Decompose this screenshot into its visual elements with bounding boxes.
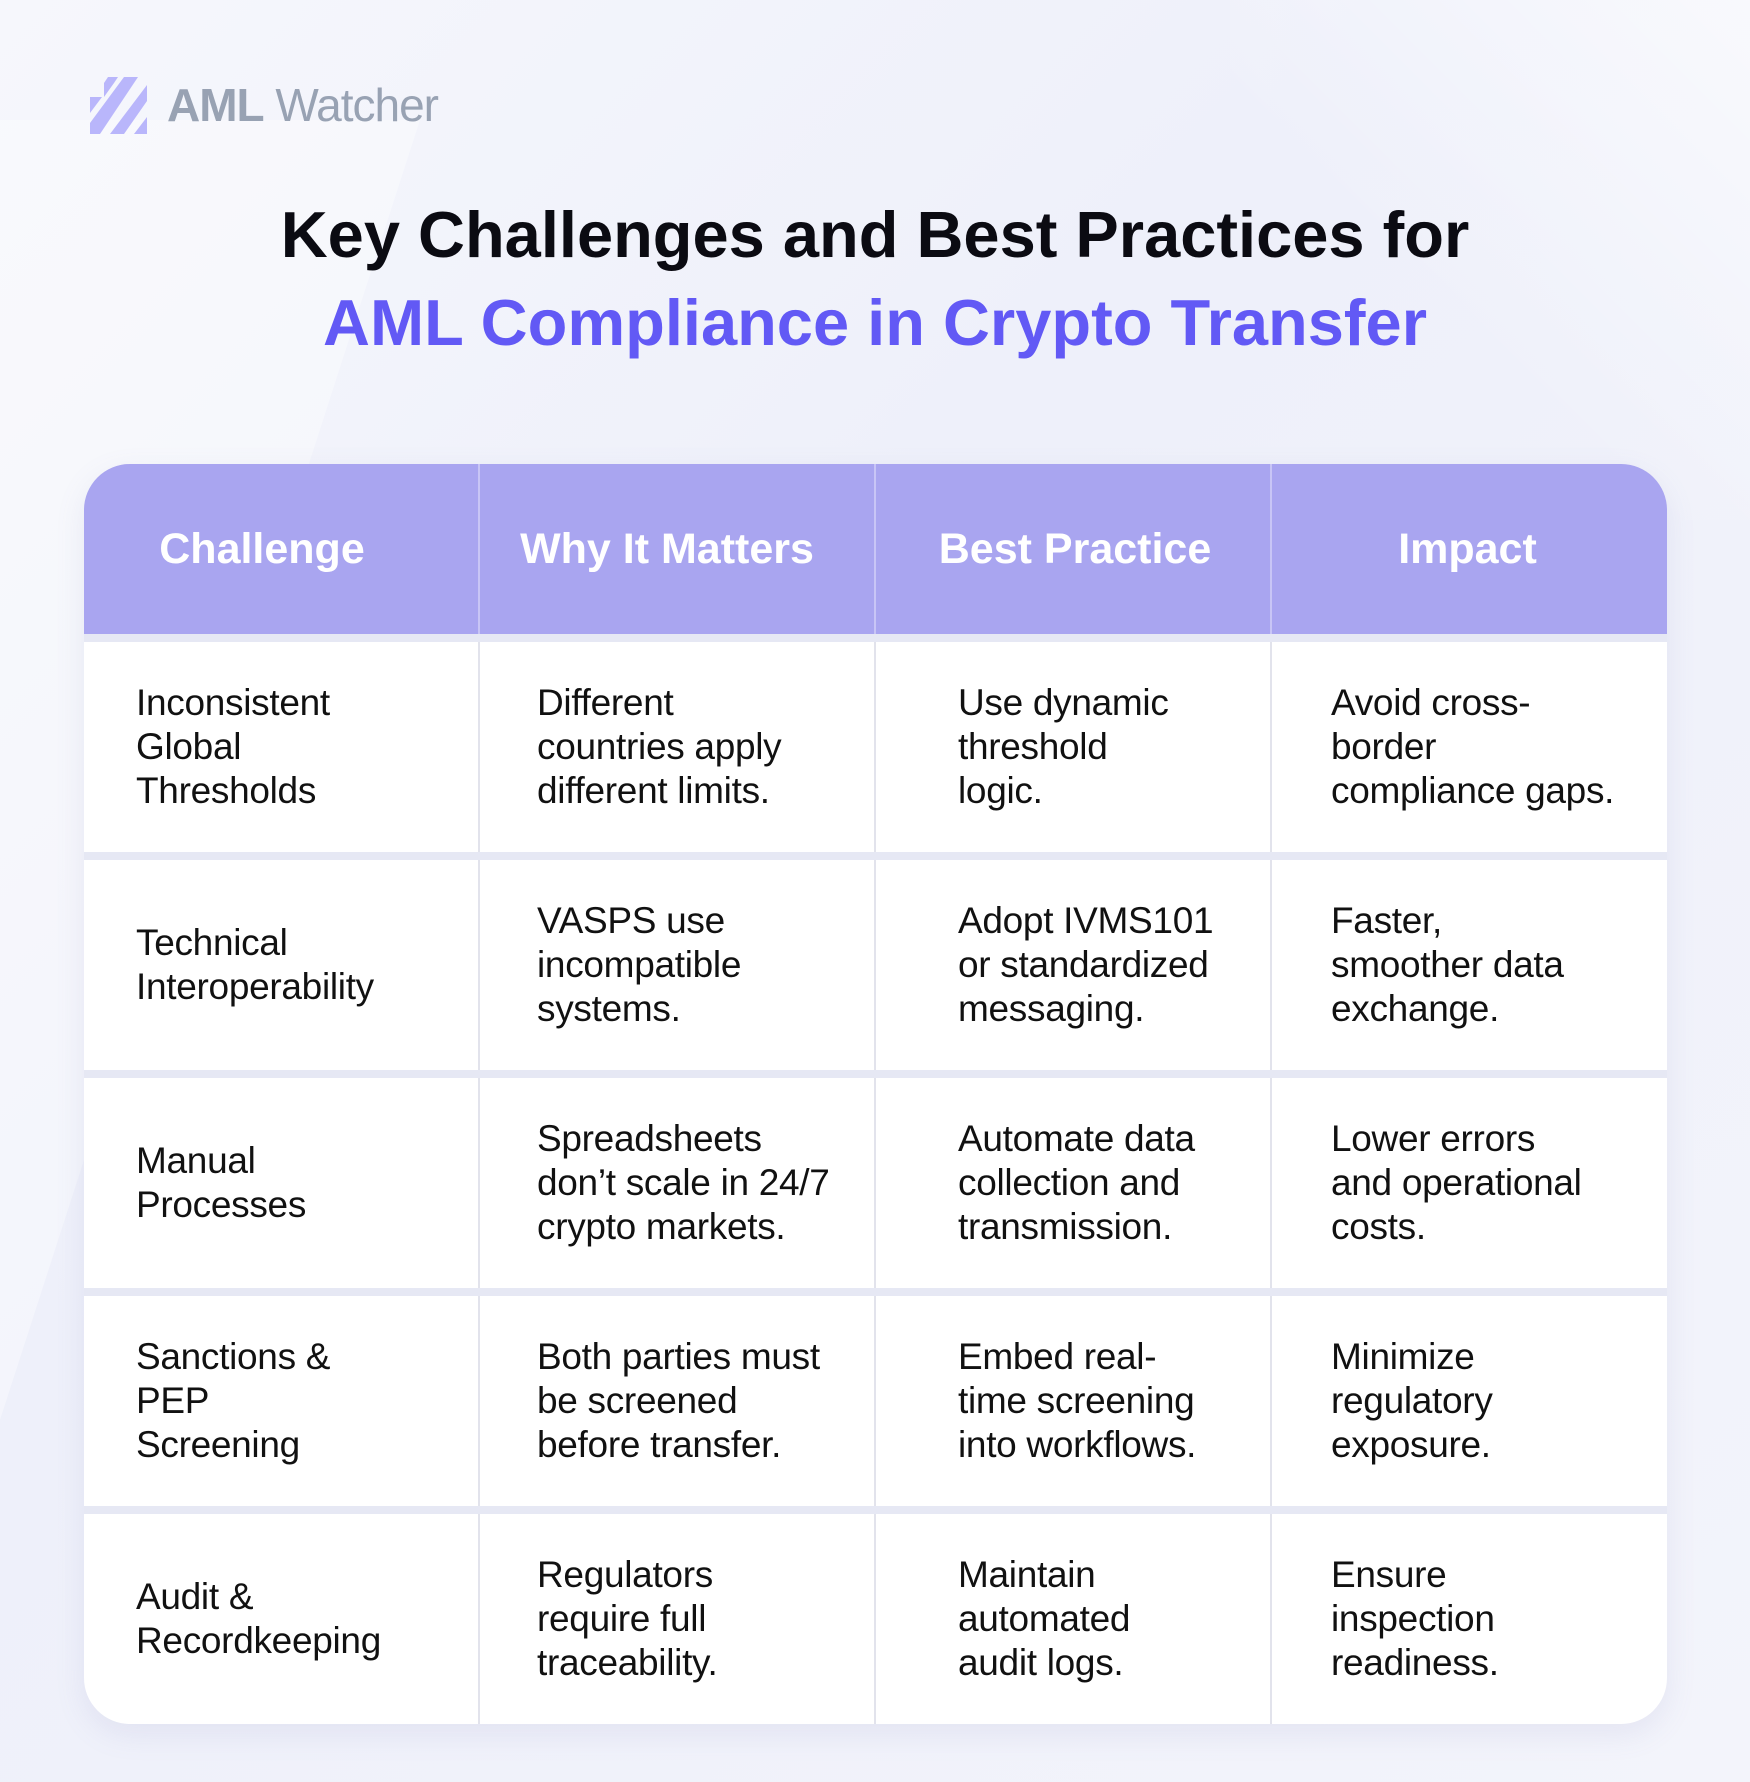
row: thresholds: Global: [136, 726, 241, 767]
row: audit: [84, 1514, 1667, 1724]
row: thresholds: different limits.: [537, 770, 770, 811]
table header: [84, 464, 1667, 634]
row: interoperability: Faster,: [1331, 900, 1442, 941]
row: manual: Processes: [136, 1184, 306, 1225]
row: thresholds: Thresholds: [136, 770, 316, 811]
row: sanctions: Sanctions &: [136, 1336, 330, 1377]
row: sanctions: into workflows.: [958, 1424, 1196, 1465]
row: sanctions: exposure.: [1331, 1424, 1491, 1465]
row: interoperability: Technical: [136, 922, 288, 963]
row: thresholds: Different: [537, 682, 673, 723]
row: audit: Maintain: [958, 1554, 1095, 1595]
row: sanctions: Screening: [136, 1424, 300, 1465]
row: thresholds: Inconsistent: [136, 682, 330, 723]
row: sanctions: Minimize: [1331, 1336, 1475, 1377]
row: thresholds: threshold: [958, 726, 1108, 767]
row: manual: collection and: [958, 1162, 1180, 1203]
row: thresholds: compliance gaps.: [1331, 770, 1614, 811]
row: audit: require full: [537, 1598, 706, 1639]
row: thresholds: logic.: [958, 770, 1043, 811]
title: [281, 198, 1469, 359]
row: thresholds: Avoid cross-: [1331, 682, 1530, 723]
table header: Challenge: [159, 524, 365, 572]
row: audit: Regulators: [537, 1554, 713, 1595]
row: interoperability: incompatible: [537, 944, 741, 985]
table header: Impact: [1398, 524, 1537, 572]
row: thresholds: Use dynamic: [958, 682, 1169, 723]
row: sanctions: [84, 1296, 1667, 1506]
icon: logo stripes: [90, 77, 147, 134]
row: audit: Ensure: [1331, 1554, 1446, 1595]
row: interoperability: Interoperability: [136, 966, 374, 1007]
row: manual: Spreadsheets: [537, 1118, 762, 1159]
row: interoperability: or standardized: [958, 944, 1209, 985]
row: audit: traceability.: [537, 1642, 718, 1683]
row: sanctions: be screened: [537, 1380, 737, 1421]
row: interoperability: VASPS use: [537, 900, 725, 941]
row: manual: Automate data: [958, 1118, 1195, 1159]
row: interoperability: exchange.: [1331, 988, 1499, 1029]
row: sanctions: time screening: [958, 1380, 1194, 1421]
row: thresholds: [84, 642, 1667, 852]
row: audit: readiness.: [1331, 1642, 1499, 1683]
row: manual: Manual: [136, 1140, 256, 1181]
row: audit: automated: [958, 1598, 1130, 1639]
row: interoperability: messaging.: [958, 988, 1144, 1029]
row: manual: [84, 1078, 1667, 1288]
row: thresholds: border: [1331, 726, 1436, 767]
row: thresholds: countries apply: [537, 726, 781, 767]
row: interoperability: smoother data: [1331, 944, 1564, 985]
row: audit: Recordkeeping: [136, 1620, 381, 1661]
row: manual: Lower errors: [1331, 1118, 1535, 1159]
row: interoperability: [84, 860, 1667, 1070]
row: sanctions: Embed real-: [958, 1336, 1156, 1377]
row: manual: don’t scale in 24/7: [537, 1162, 830, 1203]
row: interoperability: Adopt IVMS101: [958, 900, 1213, 941]
row: audit: inspection: [1331, 1598, 1495, 1639]
row: sanctions: before transfer.: [537, 1424, 781, 1465]
title: Key Challenges and Best Practices for: [281, 198, 1469, 271]
row: manual: and operational: [1331, 1162, 1582, 1203]
table header: Why It Matters: [520, 524, 814, 572]
table: [84, 464, 1667, 1724]
row: sanctions: PEP: [136, 1380, 209, 1421]
row: sanctions: regulatory: [1331, 1380, 1493, 1421]
row: manual: transmission.: [958, 1206, 1172, 1247]
table header: Best Practice: [939, 524, 1211, 572]
row: sanctions: Both parties must: [537, 1336, 820, 1377]
logo: AML Watcher: [167, 79, 438, 131]
row: audit: audit logs.: [958, 1642, 1123, 1683]
title: AML Compliance in Crypto Transfer: [323, 286, 1427, 359]
row: audit: Audit &: [136, 1576, 253, 1617]
row: manual: crypto markets.: [537, 1206, 785, 1247]
row: manual: costs.: [1331, 1206, 1426, 1247]
row: interoperability: systems.: [537, 988, 681, 1029]
